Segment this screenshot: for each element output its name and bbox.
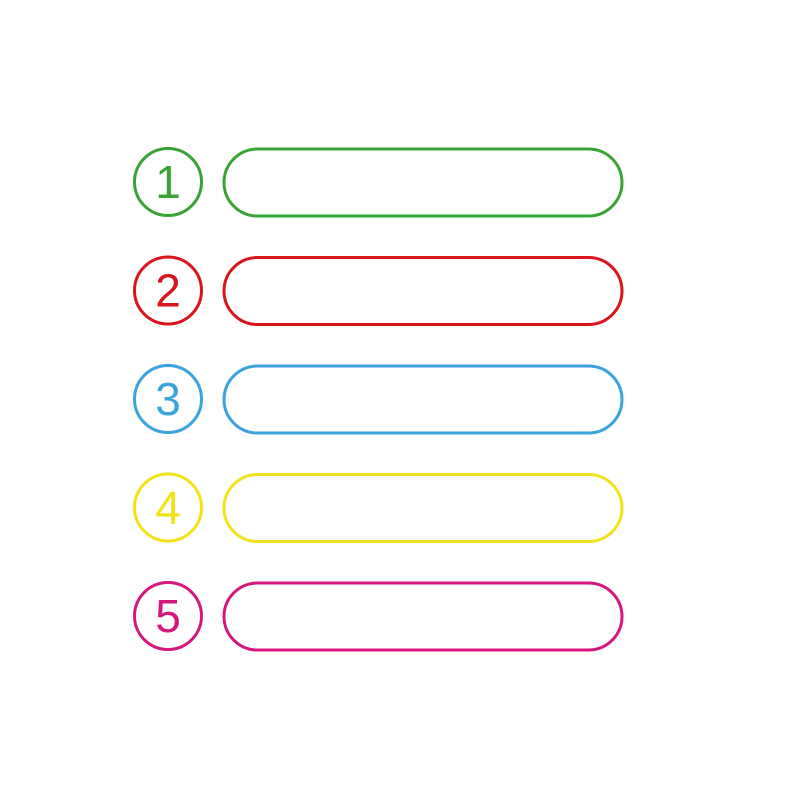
bar 3 xyxy=(224,366,622,433)
circle 5: 5 xyxy=(155,590,181,642)
bar 5 xyxy=(224,583,622,650)
bar 2 xyxy=(224,258,622,324)
item 1 xyxy=(134,148,622,216)
circle 2: 2 xyxy=(155,264,181,316)
circle 3: 3 xyxy=(155,373,181,425)
circle 4 xyxy=(134,474,202,541)
bar 1 xyxy=(224,149,622,216)
circle 1: 1 xyxy=(155,156,181,208)
item 3 xyxy=(134,366,622,433)
circle 4: 4 xyxy=(155,482,181,534)
item 4 xyxy=(134,474,622,542)
circle 5 xyxy=(134,582,202,650)
circle 2 xyxy=(134,257,202,324)
bar 4 xyxy=(224,474,622,542)
circle 3 xyxy=(134,366,202,432)
circle 1 xyxy=(134,148,202,216)
item 2 xyxy=(134,257,622,324)
item 5 xyxy=(134,582,622,650)
